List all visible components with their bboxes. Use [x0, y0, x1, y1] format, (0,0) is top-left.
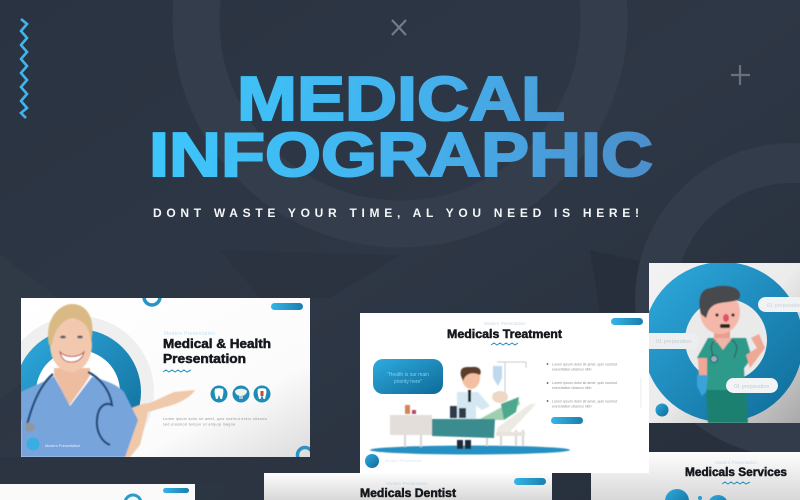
panel: bottom-middle slide, Medicals Dentist: Medicals Dentist: [360, 488, 456, 500]
title: [149, 65, 653, 190]
panel: center slide, Medicals Treatment: Modern Presentation: [385, 458, 422, 463]
icon: plus mark: [731, 65, 750, 85]
text block: description: Lorem ipsum dolor sit amet, quis nostrud exerc ullamco: [163, 417, 267, 421]
icon: doctor character: [697, 286, 765, 423]
panel: left slide, Medical & Health Presentation: Modern Presentation: [45, 444, 80, 448]
text block: description: sed eiusmod tempor ut aliquip magna: [163, 422, 235, 426]
pill button: [271, 303, 303, 310]
corner rings: [144, 289, 312, 462]
label pill: top right: [758, 297, 800, 312]
panel: bottom-left slide: [0, 484, 195, 500]
panel: right slide, doctor illustration: [649, 263, 800, 423]
text block: slide heading: Modern Presentation: [164, 331, 215, 337]
callout: priority here": [394, 379, 422, 385]
photo: nurse: [21, 304, 195, 457]
icon: cross mark: [392, 20, 406, 35]
callout: "Health is our main: [387, 372, 429, 378]
title: MEDICAL: [237, 65, 565, 134]
bullet list: exercitation ullamco nibh: [552, 386, 592, 390]
panel: center slide, Medicals Treatment: [360, 313, 649, 473]
big blue ring: [643, 262, 800, 422]
text block: slide heading: Medical & Health: [163, 337, 271, 351]
zigzag decoration: [21, 19, 27, 118]
bullet list: Lorem ipsum dolor sit amet, quis nostrud: [552, 400, 617, 404]
icon: dental implant: [232, 386, 250, 402]
hospital scene illustration: [370, 362, 570, 454]
bullet list: exercitation ullamco nibh: [552, 368, 592, 372]
bullet list: exercitation ullamco nibh: [552, 404, 592, 408]
nurse backdrop ring: [21, 318, 154, 429]
label pill: bottom: [726, 378, 778, 393]
callout: [373, 359, 443, 394]
label pill: left: [649, 333, 691, 349]
label pill: left: 01 preparation: [656, 339, 691, 345]
subtitle: DONT WASTE YOUR TIME, AL YOU NEED IS HERE!: [153, 206, 639, 220]
panel: center slide, Medicals Treatment: Modern Presentation: [484, 321, 526, 326]
title: INFOGRAPHIC: [149, 121, 653, 190]
bullet list: Lorem ipsum dolor sit amet, quis nostrud: [552, 362, 617, 366]
icon: tooth: [210, 386, 228, 402]
panel: bottom-right slide, Medicals Services: Modern Presentation: [715, 460, 757, 465]
text block: description: [163, 417, 267, 426]
icon: tooth with root: [254, 386, 270, 402]
slide heading: Medicals Treatment: [447, 327, 562, 341]
text block: slide heading: Presentation: [163, 352, 246, 366]
text block: slide heading: [163, 331, 271, 372]
panel: bottom-middle slide, Medicals Dentist: [264, 473, 552, 500]
bullet list: Lorem ipsum dolor sit amet, quis nostrud: [552, 381, 617, 385]
label pill: bottom: 01 preparation: [734, 384, 769, 390]
bullet list: [547, 362, 617, 408]
panel: bottom-right slide, Medicals Services: Medicals Services: [685, 467, 787, 479]
panel: left slide, Medical & Health Presentation: [21, 298, 310, 457]
panel: bottom-middle slide, Medicals Dentist: Modern Presentation: [386, 481, 428, 486]
panel: bottom-right slide, Medicals Services: [591, 452, 800, 500]
